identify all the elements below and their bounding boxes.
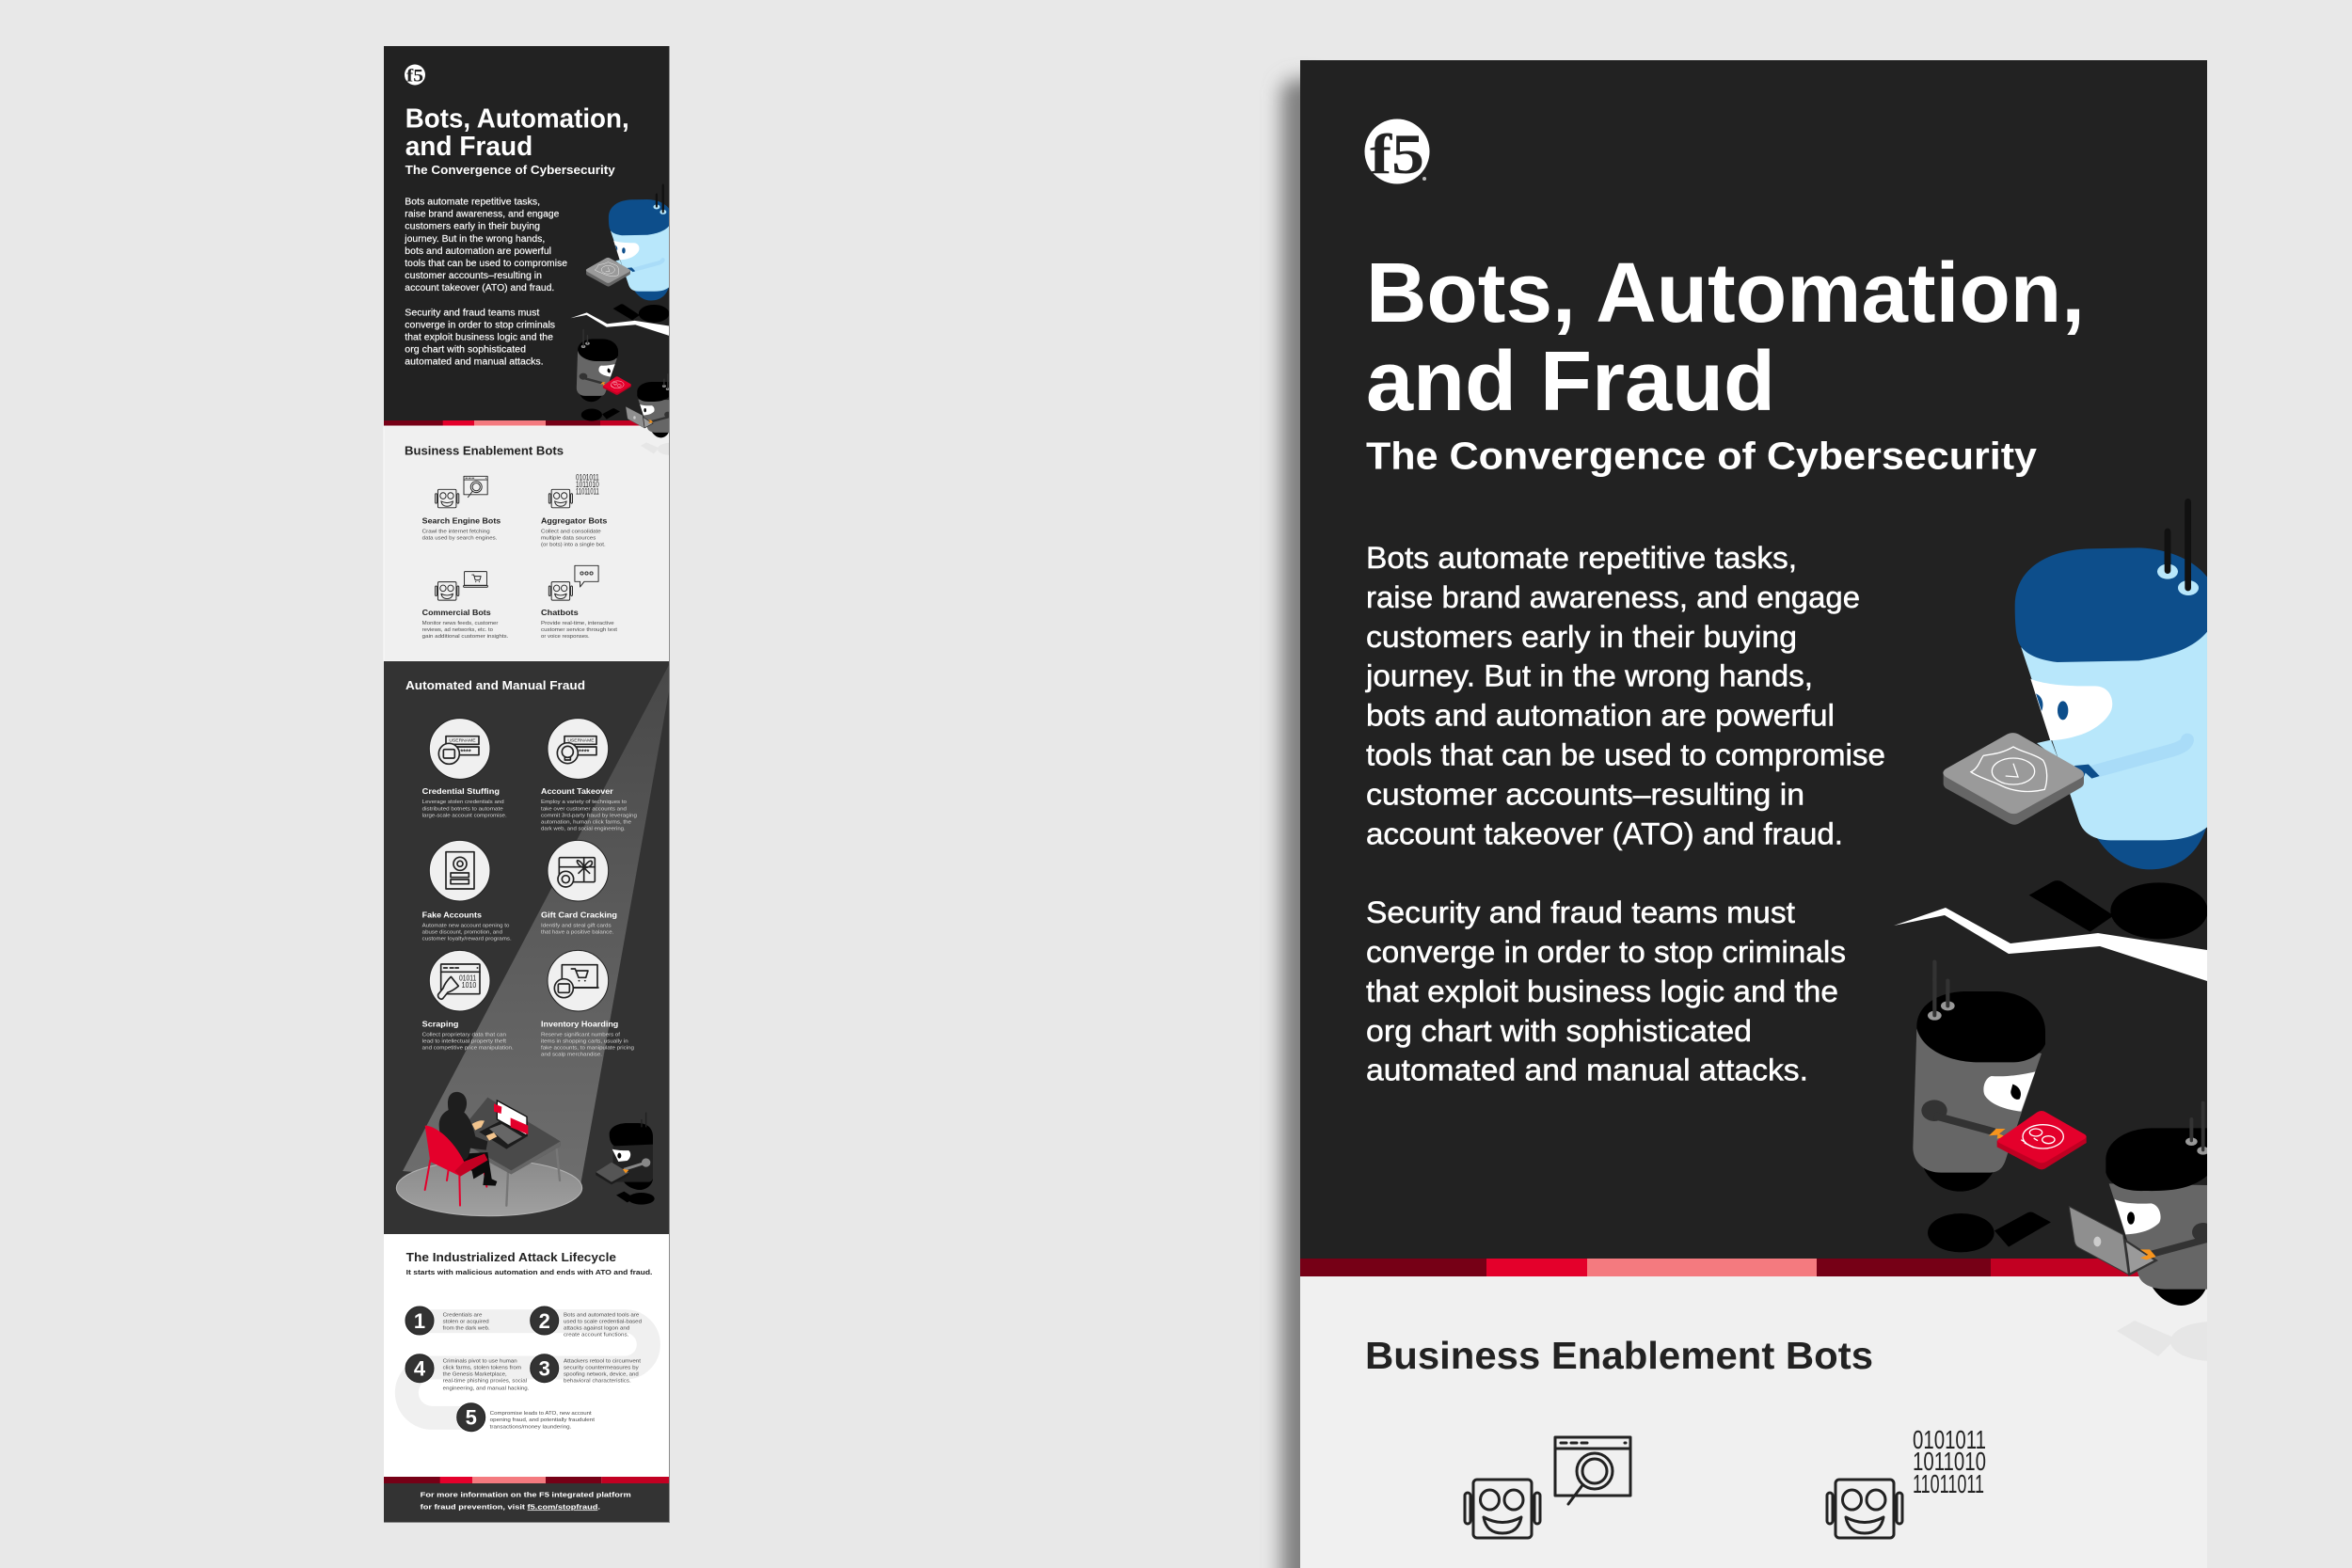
icon: account takeover: **** bbox=[579, 747, 590, 755]
spotlight floor bbox=[396, 1160, 582, 1216]
icon: aggregator bot large bbox=[1827, 1425, 1986, 1538]
icon: scraping: 1010 bbox=[462, 980, 477, 990]
intro paragraph bbox=[1365, 541, 1885, 850]
section background bbox=[384, 1234, 669, 1477]
intro paragraph small: journey. But in the wrong hands, bbox=[404, 234, 545, 245]
icon: aggregator bot large: 11011011 bbox=[1913, 1469, 1984, 1498]
second paragraph: Security and fraud teams must bbox=[1366, 895, 1795, 929]
text: account takeover bbox=[541, 787, 637, 832]
subtitle small: The Convergence of Cybersecurity bbox=[405, 163, 615, 177]
step 3: 3 bbox=[539, 1357, 550, 1381]
icon: commercial bot bbox=[436, 572, 487, 600]
text: credential stuffing: distributed botnets to automate bbox=[422, 806, 503, 812]
text: inventory hoarding: and scalp merchandise. bbox=[541, 1052, 602, 1057]
text: fake accounts: abuse discount, promotion, and bbox=[422, 930, 502, 936]
poster hero panel bbox=[384, 46, 669, 421]
step 1: 1 bbox=[414, 1309, 425, 1333]
second paragraph small: org chart with sophisticated bbox=[405, 345, 526, 356]
logo: F5 small bbox=[405, 64, 425, 87]
text: account takeover: take over customer accounts and bbox=[541, 806, 627, 812]
icon: credential stuffing: **** bbox=[460, 747, 471, 755]
text: credential stuffing: Credential Stuffing bbox=[422, 787, 500, 796]
title small: Bots, Automation, bbox=[405, 103, 629, 134]
icon: aggregator bot large: 0101011 bbox=[1913, 1425, 1986, 1454]
text: credential stuffing: large-scale account compromise. bbox=[422, 813, 507, 818]
text: chatbots: Chatbots bbox=[541, 609, 579, 617]
heading: business enablement bots: Business Enablement Bots bbox=[1365, 1334, 1873, 1377]
step 5 bbox=[457, 1403, 596, 1432]
text: fake accounts: Automate new account opening to bbox=[422, 923, 509, 928]
text: aggregator bots: Aggregator Bots bbox=[541, 517, 608, 526]
icon: fake accounts bbox=[429, 840, 490, 901]
icon: account takeover bbox=[548, 719, 609, 779]
small poster hero illustration bbox=[570, 185, 684, 455]
text: account takeover: Account Takeover bbox=[541, 787, 614, 796]
text: aggregator bots: multiple data sources bbox=[541, 536, 596, 542]
text: chatbots bbox=[541, 609, 618, 640]
icon: aggregator bot: 11011011 bbox=[576, 486, 599, 496]
step 3 bbox=[531, 1354, 642, 1385]
text: account takeover: dark web, and social engineering. bbox=[541, 826, 626, 832]
step 3: spoofing network, device, and bbox=[564, 1372, 639, 1378]
icon: inventory hoarding bbox=[548, 950, 609, 1011]
intro paragraph small: Bots automate repetitive tasks, bbox=[405, 198, 540, 208]
panel: large poster close-up bbox=[1300, 60, 2255, 1568]
intro paragraph small: tools that can be used to compromise bbox=[405, 259, 567, 269]
icon: account takeover: USERNAME bbox=[567, 738, 595, 744]
text: inventory hoarding: fake accounts, to manipulate pricing bbox=[541, 1045, 634, 1051]
icon: scraping bbox=[429, 950, 490, 1011]
large hero panel bbox=[1300, 60, 2207, 1260]
step 1 bbox=[405, 1307, 490, 1335]
text: scraping: lead to intellectual property theft bbox=[422, 1038, 507, 1044]
text: scraping: Scraping bbox=[422, 1021, 458, 1029]
step 5: opening fraud, and potentially fraudulent bbox=[490, 1418, 596, 1423]
text: credential stuffing bbox=[422, 787, 507, 818]
second paragraph small bbox=[405, 308, 555, 368]
serpentine ribbon bbox=[406, 1322, 648, 1418]
second paragraph small: that exploit business logic and the bbox=[405, 332, 553, 342]
icon: aggregator bot bbox=[548, 473, 599, 508]
text: inventory hoarding bbox=[541, 1021, 634, 1057]
panel: business enablement bots bbox=[384, 426, 669, 661]
text: search engine bots: Crawl the internet fetching bbox=[422, 530, 490, 535]
icon: search engine bot large bbox=[1465, 1437, 1630, 1538]
text: credential stuffing: Leverage stolen credentials and bbox=[422, 800, 504, 805]
intro paragraph small: customers early in their buying bbox=[405, 222, 540, 232]
step 3: security countermeasures by bbox=[564, 1366, 639, 1371]
text: scraping: and competitive price manipulation. bbox=[422, 1045, 514, 1051]
text: account takeover: commit 3rd-party fraud by leveraging bbox=[541, 813, 637, 818]
text: gift card cracking: that have a positive balance. bbox=[541, 930, 613, 936]
text: inventory hoarding: Inventory Hoarding bbox=[541, 1021, 618, 1029]
hero illustration: bots, crack and tablets bbox=[1894, 501, 2255, 1361]
text: account takeover: automation, human click farms, the bbox=[541, 819, 631, 825]
text: commercial bots bbox=[422, 609, 508, 640]
title bbox=[1366, 246, 2085, 429]
intro paragraph small: customer accounts–resulting in bbox=[405, 271, 542, 281]
step 5: transactions/money laundering. bbox=[490, 1424, 571, 1430]
step 3: behavioral characteristics. bbox=[564, 1379, 631, 1385]
text: chatbots: or voice responses. bbox=[541, 634, 590, 640]
intro paragraph: account takeover (ATO) and fraud. bbox=[1366, 816, 1843, 850]
step 2: 2 bbox=[539, 1309, 550, 1333]
illustration: hooded fraudster at desk bbox=[425, 1092, 561, 1206]
text: scraping bbox=[422, 1021, 514, 1051]
step 5: 5 bbox=[466, 1406, 477, 1430]
text: inventory hoarding: items in shopping carts, usually in bbox=[541, 1038, 628, 1044]
heading: The Industrialized Attack Lifecycle bbox=[406, 1251, 616, 1264]
second paragraph: converge in order to stop criminals bbox=[1366, 935, 1846, 969]
panel: industrialized attack lifecycle bbox=[384, 1234, 669, 1477]
step 4: the Genesis Marketplace, bbox=[443, 1372, 507, 1378]
second paragraph small: Security and fraud teams must bbox=[405, 308, 540, 318]
text: commercial bots: gain additional customer insights. bbox=[422, 634, 508, 640]
text: scraping: Collect proprietary data that can bbox=[422, 1032, 506, 1037]
panel: small full poster bbox=[384, 46, 684, 1522]
text: chatbots: customer service through text bbox=[541, 627, 618, 633]
intro paragraph: customer accounts–resulting in bbox=[1366, 777, 1804, 811]
second paragraph small: automated and manual attacks. bbox=[405, 357, 544, 368]
text: search engine bots bbox=[422, 517, 501, 542]
illustration: small black bot bbox=[596, 1113, 655, 1205]
large poster shadow bbox=[1281, 79, 1323, 1568]
title small bbox=[405, 103, 629, 162]
text: chatbots: Provide real-time, interactive bbox=[541, 621, 614, 626]
section background bbox=[384, 426, 669, 661]
text: account takeover: Employ a variety of techniques to bbox=[541, 800, 627, 805]
intro paragraph: customers early in their buying bbox=[1366, 620, 1797, 654]
intro paragraph small: raise brand awareness, and engage bbox=[405, 210, 560, 220]
text: aggregator bots: Collect and consolidate bbox=[541, 530, 601, 535]
step 4: engineering, and manual hacking. bbox=[443, 1386, 529, 1391]
colour band under hero bbox=[384, 420, 669, 426]
footer: for fraud prevention, visit f5.com/stopfraud . bbox=[421, 1502, 600, 1511]
intro paragraph: journey. But in the wrong hands, bbox=[1365, 659, 1813, 693]
step 1: stolen or acquired bbox=[443, 1319, 489, 1324]
large colour band bbox=[1300, 1259, 2207, 1276]
subheading: It starts with malicious automation and ends with ATO and fraud. bbox=[406, 1268, 652, 1276]
large light section bbox=[1300, 1276, 2207, 1568]
intro paragraph small: bots and automation are powerful bbox=[405, 246, 551, 257]
logo: F5 bbox=[1364, 119, 1430, 185]
text: commercial bots: Commercial Bots bbox=[422, 609, 491, 617]
second paragraph: that exploit business logic and the bbox=[1366, 974, 1838, 1008]
panel: automated and manual fraud bbox=[384, 661, 669, 1234]
footer bbox=[384, 1483, 669, 1522]
text: fake accounts: customer loyalty/reward programs. bbox=[422, 937, 512, 942]
intro paragraph: bots and automation are powerful bbox=[1366, 699, 1835, 733]
title: and Fraud bbox=[1366, 335, 1775, 429]
step 5: Compromise leads to ATO, new account bbox=[490, 1411, 592, 1417]
step 4: real-time phishing proxies, social bbox=[443, 1379, 527, 1385]
text: gift card cracking: Gift Card Cracking bbox=[541, 911, 617, 920]
logo: F5: f5 bbox=[1370, 123, 1424, 185]
step 1: from the dark web. bbox=[443, 1325, 490, 1331]
step 4: click farms, stolen tokens from bbox=[443, 1366, 522, 1371]
icon: aggregator bot: 0101011 bbox=[576, 473, 599, 483]
step 2 bbox=[531, 1307, 642, 1338]
heading: Business Enablement Bots bbox=[405, 444, 564, 457]
icon: aggregator bot: 1011010 bbox=[576, 480, 599, 489]
footer colour band bbox=[384, 1477, 669, 1483]
heading: Automated and Manual Fraud bbox=[405, 679, 585, 692]
spotlight beam bbox=[403, 665, 669, 1185]
step 1: Credentials are bbox=[443, 1312, 482, 1318]
text: inventory hoarding: Reserve significant numbers of bbox=[541, 1032, 621, 1037]
intro paragraph: Bots automate repetitive tasks, bbox=[1366, 541, 1797, 575]
second paragraph: automated and manual attacks. bbox=[1366, 1053, 1808, 1087]
step 2: used to scale credential-based bbox=[564, 1319, 642, 1324]
second paragraph bbox=[1366, 895, 1846, 1087]
icon: gift card cracking bbox=[548, 840, 609, 901]
text: gift card cracking: Identify and steal gift cards bbox=[541, 923, 612, 928]
text: gift card cracking bbox=[541, 911, 617, 936]
step 2: create account functions. bbox=[564, 1333, 628, 1338]
text: fake accounts: Fake Accounts bbox=[422, 911, 483, 920]
intro paragraph small bbox=[404, 198, 567, 293]
text: commercial bots: reviews, ad networks, etc. to bbox=[422, 627, 493, 633]
step 2: attacks against logon and bbox=[564, 1325, 629, 1331]
step 4: Criminals pivot to use human bbox=[443, 1359, 517, 1365]
text: aggregator bots bbox=[541, 517, 608, 548]
icon: search engine bot bbox=[436, 476, 487, 508]
step 4 bbox=[405, 1354, 529, 1391]
icon: credential stuffing: USERNAME bbox=[449, 738, 476, 744]
second paragraph: org chart with sophisticated bbox=[1366, 1014, 1752, 1048]
title small: and Fraud bbox=[405, 132, 532, 162]
icon: aggregator bot large: 1011010 bbox=[1913, 1447, 1986, 1476]
logo: F5 small: f5 bbox=[406, 66, 423, 87]
icon: chatbot bbox=[548, 565, 598, 600]
intro paragraph: raise brand awareness, and engage bbox=[1366, 580, 1860, 614]
text: commercial bots: Monitor news feeds, customer bbox=[422, 621, 499, 626]
text: aggregator bots: (or bots) into a single bot. bbox=[541, 543, 606, 548]
step 2: Bots and automated tools are bbox=[564, 1312, 639, 1318]
step 4: 4 bbox=[414, 1357, 426, 1381]
section background bbox=[384, 661, 669, 1234]
text: search engine bots: Search Engine Bots bbox=[422, 517, 501, 526]
title: Bots, Automation, bbox=[1366, 246, 2085, 341]
text: search engine bots: data used by search engines. bbox=[422, 536, 497, 542]
icon: credential stuffing bbox=[429, 719, 490, 779]
subtitle: The Convergence of Cybersecurity bbox=[1366, 435, 2037, 478]
poster edge bbox=[384, 46, 670, 1522]
intro paragraph: tools that can be used to compromise bbox=[1366, 737, 1885, 771]
second paragraph small: converge in order to stop criminals bbox=[405, 320, 555, 330]
text: fake accounts bbox=[422, 911, 512, 942]
intro paragraph small: account takeover (ATO) and fraud. bbox=[405, 283, 554, 293]
footer: For more information on the F5 integrated platform bbox=[421, 1491, 631, 1499]
icon: scraping: 01011 bbox=[459, 974, 477, 983]
step 3: Attackers retool to circumvent bbox=[564, 1359, 642, 1365]
